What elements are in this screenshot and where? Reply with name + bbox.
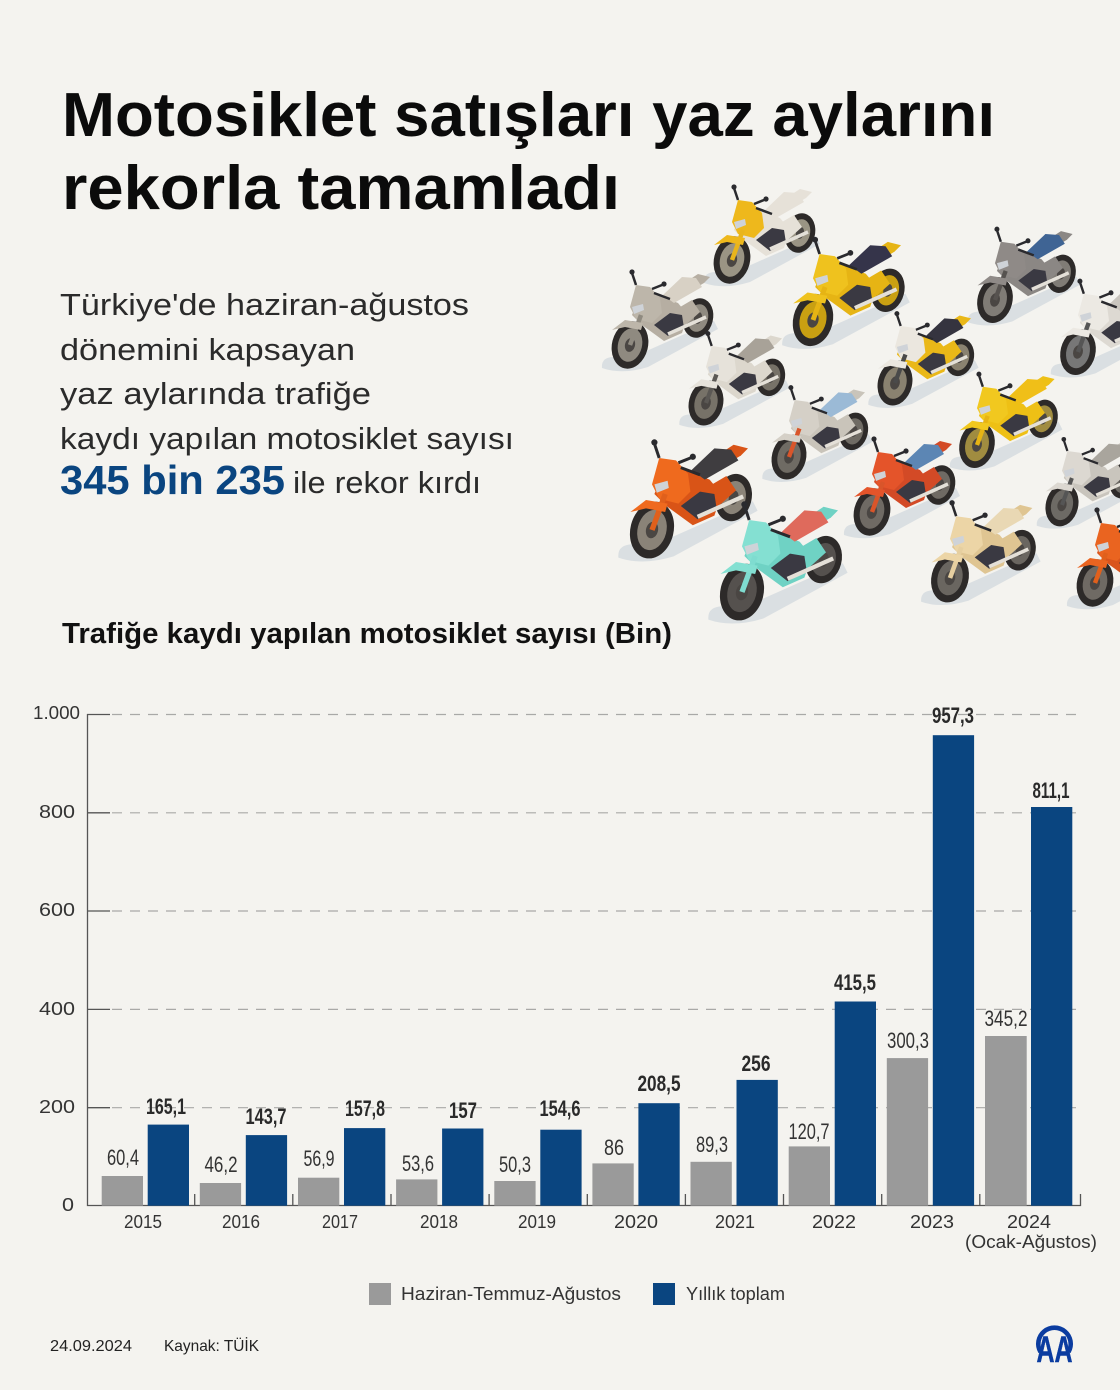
legend item: Haziran-Temmuz-Ağustos: Haziran-Temmuz-Ağustos xyxy=(401,1284,621,1304)
x axis labels: 2022 xyxy=(812,1212,856,1232)
icon: cream motorcycle xyxy=(921,500,1041,606)
legend item: Yıllık toplam xyxy=(653,1283,785,1305)
value labels: 50,3 xyxy=(499,1152,531,1177)
value labels: 60,4 xyxy=(107,1145,139,1170)
bar chart xyxy=(33,703,1097,1252)
blue bars: Yıllık toplam xyxy=(148,735,1072,1206)
icon: yellow motorcycle xyxy=(782,237,910,350)
x axis labels: 2015 xyxy=(124,1212,162,1232)
icon: teal motorcycle xyxy=(708,501,848,625)
value labels: 46,2 xyxy=(204,1152,238,1177)
icon: white motorcycle xyxy=(679,331,790,429)
x axis labels: (Ocak-Ağustos) xyxy=(965,1232,1097,1252)
value labels: 415,5 xyxy=(834,970,876,995)
y axis labels xyxy=(33,703,80,1215)
value labels: 957,3 xyxy=(932,703,974,728)
icon: orange motorcycle xyxy=(618,439,758,563)
icon: light motorcycle at right edge xyxy=(1037,437,1120,530)
x axis labels: 2021 xyxy=(715,1212,755,1232)
y axis labels: 400 xyxy=(39,999,75,1019)
x axis labels: 2023 xyxy=(910,1212,954,1232)
y axis labels: 1.000 xyxy=(33,703,80,723)
icon: yellow-white motorcycle xyxy=(704,184,820,288)
value labels: 300,3 xyxy=(887,1028,929,1053)
x axis labels: 2018 xyxy=(420,1212,458,1232)
icon: yellow-white motorcycle with dark seat xyxy=(868,311,979,409)
icon: white motorcycle at right edge xyxy=(1051,279,1120,379)
value labels: 89,3 xyxy=(696,1132,728,1157)
value labels: 53,6 xyxy=(402,1151,434,1176)
chart heading: Trafiğe kaydı yapılan motosiklet sayısı (Bin) xyxy=(62,618,672,650)
icon: dark grey motorcycle xyxy=(968,227,1080,327)
footer: date and source xyxy=(50,1336,259,1355)
icon: AA logo xyxy=(1036,1328,1072,1370)
x axis labels: 2024 xyxy=(1007,1212,1051,1232)
value labels: 811,1 xyxy=(1032,778,1070,803)
legend xyxy=(369,1283,785,1305)
value labels: 56,9 xyxy=(304,1146,334,1171)
title: Motosiklet satışları yaz aylarını xyxy=(62,81,995,150)
x axis labels: 2017 xyxy=(322,1212,358,1232)
intro text: kaydı yapılan motosiklet sayısı xyxy=(60,421,514,456)
intro text: ile rekor kırdı xyxy=(293,465,481,500)
intro text: Türkiye'de haziran-ağustos xyxy=(60,287,469,322)
x axis labels: 2019 xyxy=(518,1212,556,1232)
value labels: 157,8 xyxy=(345,1096,385,1121)
value labels: 143,7 xyxy=(246,1104,286,1129)
intro text: yaz aylarında trafiğe xyxy=(60,376,371,411)
icon: orange motorcycle at right edge xyxy=(1067,507,1120,611)
icon: grey motorcycle xyxy=(602,269,718,373)
intro text xyxy=(60,287,514,503)
x axis labels xyxy=(124,1212,1097,1252)
intro text: dönemini kapsayan xyxy=(60,332,355,367)
value labels: 86 xyxy=(604,1135,624,1160)
footer: date and source: Kaynak: TÜİK xyxy=(164,1336,259,1355)
y axis labels: 200 xyxy=(39,1097,75,1117)
legend item: Yıllık toplam: Yıllık toplam xyxy=(686,1284,785,1304)
value labels: 120,7 xyxy=(788,1119,830,1144)
icon: red-blue motorcycle xyxy=(844,436,960,540)
value labels: 165,1 xyxy=(146,1094,186,1119)
title xyxy=(62,81,995,223)
y axis labels: 0 xyxy=(62,1195,74,1215)
title: rekorla tamamladı xyxy=(62,154,620,223)
y axis labels: 800 xyxy=(39,802,75,822)
intro text: 345 bin 235 xyxy=(60,457,285,503)
icon: AA logo: AA xyxy=(1036,1329,1072,1370)
grey bars: Haziran-Temmuz-Ağustos xyxy=(102,1036,1027,1206)
footer: date and source: 24.09.2024 xyxy=(50,1338,132,1355)
x axis labels: 2020 xyxy=(614,1212,658,1232)
illustration: motorcycles xyxy=(602,184,1120,625)
value labels xyxy=(107,703,1070,1177)
icon: silver motorcycle xyxy=(762,385,873,483)
x axis labels: 2016 xyxy=(222,1212,260,1232)
value labels: 208,5 xyxy=(638,1071,680,1096)
value labels: 154,6 xyxy=(540,1096,580,1121)
y axis labels: 600 xyxy=(39,900,75,920)
value labels: 157 xyxy=(449,1098,477,1123)
icon: bright yellow motorcycle xyxy=(950,372,1062,472)
value labels: 345,2 xyxy=(984,1006,1028,1031)
value labels: 256 xyxy=(742,1051,770,1076)
